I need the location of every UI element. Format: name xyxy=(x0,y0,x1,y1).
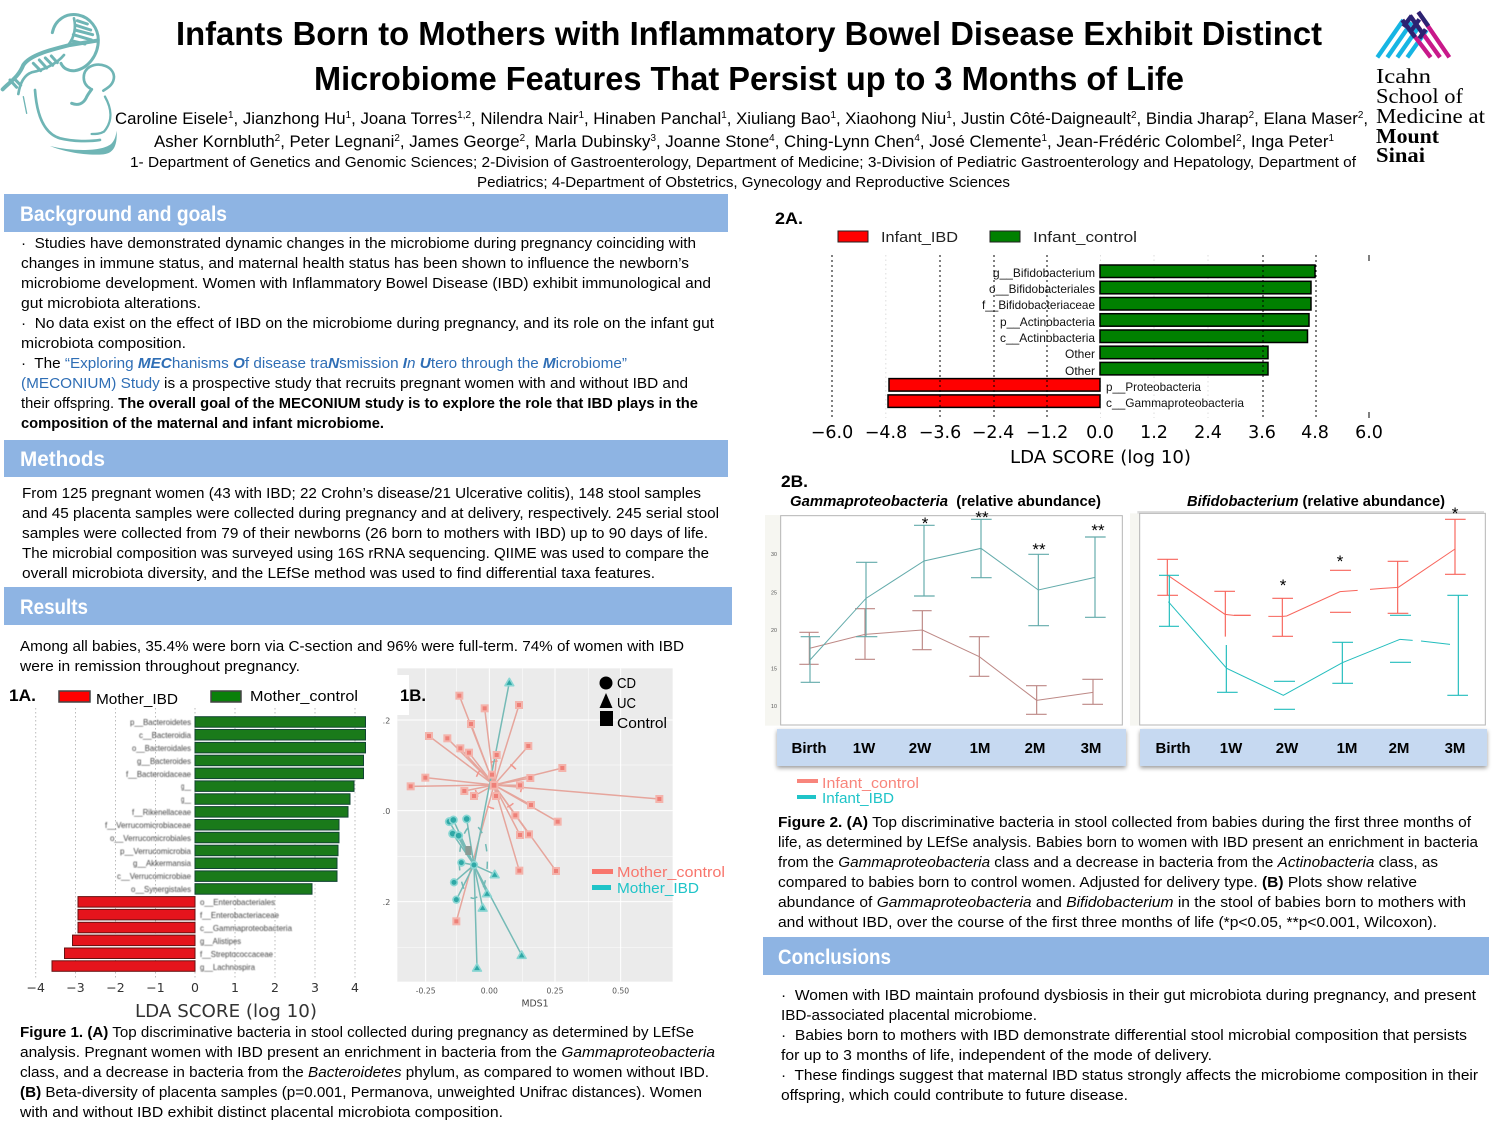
affiliations: Pediatrics; 4-Department of Obstetrics, Gynecology and Reproductive Sciences xyxy=(477,175,1010,191)
axis 2A: 4.8 xyxy=(1301,423,1329,443)
legend 2B: Infant_IBD xyxy=(822,790,894,807)
logo: Icahn School of Medicine at Mount Sinai: School of xyxy=(1376,84,1463,108)
label 2A: 2A. xyxy=(775,209,803,228)
axis 1A: 3 xyxy=(311,980,319,995)
authors: 1 xyxy=(721,110,727,121)
significance stars: * xyxy=(922,514,929,533)
affiliations: 1- Department of Genetics and Genomic Sciences; 2-Division of Gastroenterology, Department of Medicine; 3-Division of Pediatric Gastroenterology and Hepatology, Department of xyxy=(130,155,1357,171)
legend 1B groups: Mother_IBD xyxy=(617,880,699,897)
time axis band: 3M xyxy=(1445,740,1465,757)
text block: background: composition of the maternal and infant microbiome. xyxy=(21,415,384,432)
caption: figure 2: Figure 2. (A) Top discriminative bacteria in stool collected from babies during the first three months of xyxy=(778,814,1472,831)
axis 1A: LDA SCORE (log 10) xyxy=(135,1001,317,1022)
chart title: Gammaproteobacteria (relative abundance) xyxy=(790,493,1101,510)
significance stars: * xyxy=(1337,552,1344,571)
axis 2A: 2.4 xyxy=(1194,423,1222,443)
heading: background and goals xyxy=(4,194,728,232)
axis 2A: 6.0 xyxy=(1355,423,1383,443)
axis 1A: 0 xyxy=(191,980,199,995)
taxa labels 1A: f__Streptococcaceae xyxy=(200,949,273,959)
taxa labels 1A: g__ xyxy=(181,781,191,791)
panel: methods xyxy=(4,440,728,582)
taxa labels 2A xyxy=(982,266,1244,410)
authors: , Nilendra Nair xyxy=(471,109,579,128)
authors: 3 xyxy=(650,133,656,144)
chart 2A: LDA bar chart, infants xyxy=(775,209,1383,468)
caption: figure 1: class, and a decrease in bacteria from the Bacteroidetes phylum, as compared to women without IBD. xyxy=(20,1064,709,1081)
authors: , Marla Dubinsky xyxy=(525,132,651,151)
chart 2B left: Gammaproteobacteria: 15 xyxy=(771,666,777,672)
text block: background: gut microbiota alterations. xyxy=(21,295,201,312)
significance stars xyxy=(1280,504,1459,595)
heading: results xyxy=(4,587,732,625)
time axis band: 1W xyxy=(1220,740,1243,757)
title: Microbiome Features That Persist up to 3 Months of Life xyxy=(314,60,1184,97)
axis 1A: −3 xyxy=(66,980,85,995)
text block: methods: The microbial composition was surveyed using 16S rRNA sequencing. QIIME was used to compare the xyxy=(22,545,709,562)
legend 1A xyxy=(59,688,358,708)
text block: background: · The “Exploring MEChanisms Of disease traNsmission In Utero through the Microbiome” xyxy=(21,355,627,372)
taxa labels 1A: g__Lachnospira xyxy=(200,962,255,972)
pink series xyxy=(799,609,1103,714)
label 1B: 1B. xyxy=(400,686,426,705)
IBD points xyxy=(446,678,526,971)
legend 1B shapes xyxy=(600,675,667,732)
authors: 1 xyxy=(578,110,584,121)
text block: methods: and 45 placenta samples were collected during pregnancy and at delivery, respectively. 245 serial stool xyxy=(22,505,719,522)
axis 1A: −4 xyxy=(26,980,45,995)
time axis band: 2W xyxy=(909,740,932,757)
authors: , Jean-Frédéric Colombel xyxy=(1047,132,1236,151)
teal series xyxy=(801,519,1106,682)
taxa labels 1A: o__Bacteroidales xyxy=(132,743,191,753)
caption: figure 2 xyxy=(778,814,1479,931)
caption: figure 2: life, as determined by LEfSe analysis. Babies born to women with IBD present an enrichment in bacteria xyxy=(778,834,1479,851)
authors: 1 xyxy=(1328,133,1334,144)
authors xyxy=(115,109,1368,151)
authors: 2 xyxy=(275,133,281,144)
significance stars: ** xyxy=(1091,521,1105,540)
axis 1A: 2 xyxy=(271,980,279,995)
green bars xyxy=(195,717,366,894)
authors: , Joanne Stone xyxy=(656,132,769,151)
taxa labels 2A: g__Bifidobacterium xyxy=(993,266,1095,280)
axis 2A: LDA SCORE (log 10) xyxy=(1010,447,1191,468)
axis 2A: −6.0 xyxy=(811,423,853,443)
legend 1B groups: Mother_control xyxy=(617,864,725,881)
logo: Icahn School of Medicine at Mount Sinai: Sinai xyxy=(1376,143,1425,167)
significance stars xyxy=(922,508,1105,559)
chart 2B left: Gammaproteobacteria: 20 xyxy=(771,628,777,634)
taxa labels 1A: o__Enterobacteriales xyxy=(200,897,275,907)
taxa labels 2A: c__Gammaproteobacteria xyxy=(1106,396,1244,410)
authors: 4 xyxy=(914,133,920,144)
authors: , José Clemente xyxy=(920,132,1042,151)
text block: conclusions: · These findings suggest that maternal IBD status strongly affects the microbiome composition in their xyxy=(781,1067,1478,1084)
time axis band xyxy=(777,729,1126,766)
title xyxy=(176,15,1322,97)
logo: Icahn School of Medicine at Mount Sinai: Icahn xyxy=(1376,64,1432,88)
chart 2B left: Gammaproteobacteria: 10 xyxy=(771,704,777,710)
red bars xyxy=(52,897,195,971)
caption: figure 2: compared to babies born to control women. Adjusted for delivery type. (B) Plots show relative xyxy=(778,874,1417,891)
panel: background and goals xyxy=(4,194,728,432)
taxa labels 1A: f__Rikenellaceae xyxy=(132,807,191,817)
authors: 1 xyxy=(946,110,952,121)
authors: , Jianzhong Hu xyxy=(234,109,346,128)
label 1A: 1A. xyxy=(9,686,36,705)
axis 2A: −2.4 xyxy=(972,423,1014,443)
taxa labels 1A: o__Verrucomicrobiales xyxy=(110,833,191,843)
chart 2B left: Gammaproteobacteria xyxy=(765,493,1126,807)
taxa labels 1A: p__Verrucomicrobia xyxy=(120,846,191,856)
authors: , Justin Côté-Daigneault xyxy=(952,109,1131,128)
legend 1B shapes: CD xyxy=(617,675,636,692)
affiliations xyxy=(130,155,1357,191)
spokes xyxy=(411,696,659,921)
legend 1B groups xyxy=(592,864,725,897)
authors: 1 xyxy=(346,110,352,121)
legend 1A: Mother_control xyxy=(250,688,358,705)
taxa labels 2A: f__Bifidobacteriaceae xyxy=(982,298,1095,312)
authors: , xyxy=(1363,109,1368,128)
time axis band: 2W xyxy=(1276,740,1299,757)
chart 2B left: Gammaproteobacteria: 25 xyxy=(771,590,777,596)
legend 1A: Mother_IBD xyxy=(96,691,178,708)
authors: 2 xyxy=(1358,110,1364,121)
axis 1A: −2 xyxy=(106,980,125,995)
authors: , Xiuliang Bao xyxy=(727,109,830,128)
taxa labels 1A: g__Akkermansia xyxy=(133,858,191,868)
authors: , Peter Legnani xyxy=(280,132,394,151)
authors: 2 xyxy=(520,133,526,144)
taxa labels 2A: Other xyxy=(1065,347,1095,361)
taxa labels 1A: f__Bacteroidaceae xyxy=(126,769,191,779)
text block: background: · No data exist on the effect of IBD on the microbiome during pregnancy, and its role on the infant gut xyxy=(21,315,715,332)
text block: conclusions: for up to 3 months of life, independent of the mode of delivery. xyxy=(781,1047,1212,1064)
taxa labels 1A: g__ xyxy=(181,794,191,804)
taxa labels 1A: g__Bacteroides xyxy=(137,756,191,766)
axis 2A: −3.6 xyxy=(919,423,961,443)
text block: methods: From 125 pregnant women (43 with IBD; 22 Crohn’s disease/21 Ulcerative colitis), 148 stool samples xyxy=(22,485,701,502)
chart 1B: beta diversity scatter: 0.25 xyxy=(546,986,564,995)
authors: 2 xyxy=(1236,133,1242,144)
text block: results: Among all babies, 35.4% were born via C-section and 96% were full-term. 74% of women with IBD xyxy=(20,638,684,655)
axis 2A xyxy=(811,423,1383,468)
logo: Icahn School of Medicine at Mount Sinai: Medicine at xyxy=(1376,104,1485,128)
panel: conclusions xyxy=(763,937,1489,1104)
significance stars: * xyxy=(1452,504,1459,523)
time axis band: 2M xyxy=(1389,740,1409,757)
time axis band: Birth xyxy=(792,740,826,757)
axis 2A: 3.6 xyxy=(1248,423,1276,443)
caption: figure 1: analysis. Pregnant women with IBD present an enrichment in bacteria from the Gammaproteobacteria xyxy=(20,1044,715,1061)
heading: conclusions xyxy=(763,937,1489,975)
time axis band xyxy=(1140,729,1487,766)
authors: Asher Kornbluth xyxy=(154,132,276,151)
time axis band: 1M xyxy=(970,740,990,757)
text block: background: microbiome development. Women with Inflammatory Bowel Disease (IBD) exhibit immunological and xyxy=(21,275,711,292)
chart 1B: beta diversity scatter xyxy=(383,668,725,1010)
authors: , Inga Peter xyxy=(1241,132,1329,151)
time axis band: 1W xyxy=(853,740,876,757)
panel: results xyxy=(4,587,732,1121)
significance stars: ** xyxy=(975,508,989,527)
text block: methods: overall microbiota diversity, and the LEfSe method was used to find differential taxa features. xyxy=(22,565,655,582)
authors: 2 xyxy=(1131,110,1137,121)
text block: conclusions xyxy=(781,987,1478,1104)
chart 1B: beta diversity scatter: -0.25 xyxy=(416,986,436,995)
text block: background: · Studies have demonstrated dynamic changes in the microbiome during pregnancy coinciding with xyxy=(21,235,696,252)
taxa labels 1A: c__Bacteroidia xyxy=(139,730,191,740)
control squares xyxy=(408,693,662,924)
logo: Icahn School of Medicine at Mount Sinai xyxy=(1376,12,1485,167)
text block: background: (MECONIUM) Study is a prospective study that recruits pregnant women with and without IBD and xyxy=(21,375,688,392)
legend 2A: Infant_IBD xyxy=(881,229,958,246)
text block: background: changes in immune status, and maternal health status has been shown to influence the newborn’s xyxy=(21,255,689,272)
chart 1B: beta diversity scatter: .2 xyxy=(383,898,390,907)
text block: conclusions: IBD-associated placental microbiome. xyxy=(781,1007,1037,1024)
authors: , Xiaohong Niu xyxy=(836,109,946,128)
text block: methods xyxy=(22,485,719,582)
authors: Caroline Eisele xyxy=(115,109,229,128)
taxa labels 1A: g__Alistipes xyxy=(200,936,241,946)
legend 1B shapes: Control xyxy=(617,715,667,732)
heading: conclusions: Conclusions xyxy=(778,946,891,969)
authors: 1 xyxy=(830,110,836,121)
chart 1B: beta diversity scatter: .0 xyxy=(383,807,390,816)
taxa labels 2A: p__Proteobacteria xyxy=(1106,380,1201,394)
title: Infants Born to Mothers with Inflammatory Bowel Disease Exhibit Distinct xyxy=(176,15,1322,52)
icon: mother and child DNA logo xyxy=(3,15,117,155)
text block: background xyxy=(21,235,715,432)
axis 1A: 1 xyxy=(231,980,239,995)
axis 2A: −1.2 xyxy=(1026,423,1068,443)
taxa labels 1A xyxy=(105,717,292,972)
chart 1B: beta diversity scatter: .2 xyxy=(383,716,390,725)
taxa labels 1A: f__Enterobacteriaceae xyxy=(200,910,279,920)
caption: figure 2: abundance of Gammaproteobacteria and Bifidobacterium in the stool of babies born to mothers with xyxy=(778,894,1466,911)
text block: results: were in remission throughout pregnancy. xyxy=(19,658,300,675)
legend 2B: Infant_control xyxy=(822,775,919,792)
taxa labels 2A: p__Actinobacteria xyxy=(1000,315,1095,329)
chart title: Bifidobacterium (relative abundance) xyxy=(1187,493,1445,510)
legend 2B xyxy=(797,775,919,807)
caption: figure 2: from the Gammaproteobacteria class and a decrease in bacteria from the Actinobacteria class, as xyxy=(778,854,1438,871)
axis 1A xyxy=(26,980,359,1022)
label 1B xyxy=(397,675,426,715)
bars 2A xyxy=(888,265,1315,407)
authors: , Bindia Jharap xyxy=(1137,109,1249,128)
text block: background: their offspring. The overall goal of the MECONIUM study is to explore the role that IBD plays in the xyxy=(21,395,698,412)
chart 1B: beta diversity scatter: 0.50 xyxy=(612,986,629,995)
axis 1A: −1 xyxy=(146,980,165,995)
chart 1A: LDA bar chart, mothers xyxy=(9,686,366,1022)
authors: , Elana Maser xyxy=(1254,109,1358,128)
text block: background: microbiota composition. xyxy=(21,335,186,352)
time axis band: 2M xyxy=(1025,740,1045,757)
authors: 1 xyxy=(1042,133,1047,144)
time axis band: 3M xyxy=(1081,740,1101,757)
caption: figure 1: Figure 1. (A) Top discriminative bacteria in stool collected during pregnancy as determined by LEfSe xyxy=(20,1024,694,1041)
text block: conclusions: offspring, which could contribute to future disease. xyxy=(781,1087,1128,1104)
taxa labels 1A: c__Gammaproteobacteria xyxy=(200,923,292,933)
chart 1B: beta diversity scatter: 0.00 xyxy=(481,986,498,995)
caption: figure 1: (B) Beta-diversity of placenta samples (p=0.001, Permanova, unweighted Unifrac distances). Women xyxy=(20,1084,702,1101)
axis 1A: 4 xyxy=(351,980,359,995)
authors: , Ching-Lynn Chen xyxy=(775,132,914,151)
authors: 1,2 xyxy=(457,110,471,121)
axis 2A: 1.2 xyxy=(1140,423,1168,443)
taxa labels 1A: c__Verrucomicrobiae xyxy=(117,871,191,881)
text block: methods: samples were collected from 79 of their newborns (26 born to mothers with IBD) up to 90 days of life. xyxy=(22,525,708,542)
heading: methods xyxy=(4,440,728,477)
heading: results: Results xyxy=(20,596,88,619)
legend 2A xyxy=(838,229,1137,246)
significance stars: * xyxy=(1280,576,1287,595)
authors: 2 xyxy=(394,133,400,144)
authors: 2 xyxy=(1249,110,1255,121)
heading: methods: Methods xyxy=(20,448,105,471)
time axis band: Birth xyxy=(1156,740,1190,757)
heading: background and goals: Background and goals xyxy=(20,203,227,226)
taxa labels 1A: o__Synergistales xyxy=(131,884,191,894)
taxa labels 2A: c__Actinobacteria xyxy=(1000,331,1095,345)
taxa labels 1A: f__Verrucomicrobiaceae xyxy=(105,820,191,830)
legend 2A: Infant_control xyxy=(1033,229,1137,246)
chart 1B: beta diversity scatter: MDS1 xyxy=(521,999,549,1010)
authors: 4 xyxy=(769,133,775,144)
taxa labels 1A: p__Bacteroidetes xyxy=(130,717,191,727)
significance stars: ** xyxy=(1032,540,1046,559)
text block: conclusions: · Women with IBD maintain profound dysbiosis in their gut microbiota during pregnancy, and present xyxy=(781,987,1477,1004)
caption: figure 1: with and without IBD exhibit distinct placental microbiota composition. xyxy=(19,1104,503,1121)
axis 2A: 0.0 xyxy=(1086,423,1114,443)
legend 1B shapes: UC xyxy=(617,695,636,712)
text block: conclusions: · Babies born to mothers with IBD demonstrate differential stool microbial composition that persists xyxy=(781,1027,1467,1044)
authors: , Hinaben Panchal xyxy=(584,109,721,128)
chart 2B right: Bifidobacterium xyxy=(1130,493,1487,766)
label 2B: 2B. xyxy=(781,472,808,491)
authors: 1 xyxy=(228,110,234,121)
taxa labels 2A: Other xyxy=(1065,364,1095,378)
logo: Icahn School of Medicine at Mount Sinai: Mount xyxy=(1376,124,1439,148)
taxa labels 2A: o__Bifidobacteriales xyxy=(989,282,1095,296)
chart 2B left: Gammaproteobacteria: 30 xyxy=(771,552,777,558)
time axis band: 1M xyxy=(1337,740,1357,757)
text block: results xyxy=(19,638,684,675)
caption: figure 1 xyxy=(19,1024,715,1121)
authors: , Joana Torres xyxy=(351,109,457,128)
axis 2A: −4.8 xyxy=(865,423,907,443)
caption: figure 2: and without IBD, over the course of the first three months of life (*p<0.05, **p<0.001, Wilcoxon). xyxy=(778,914,1437,931)
authors: , James George xyxy=(400,132,520,151)
